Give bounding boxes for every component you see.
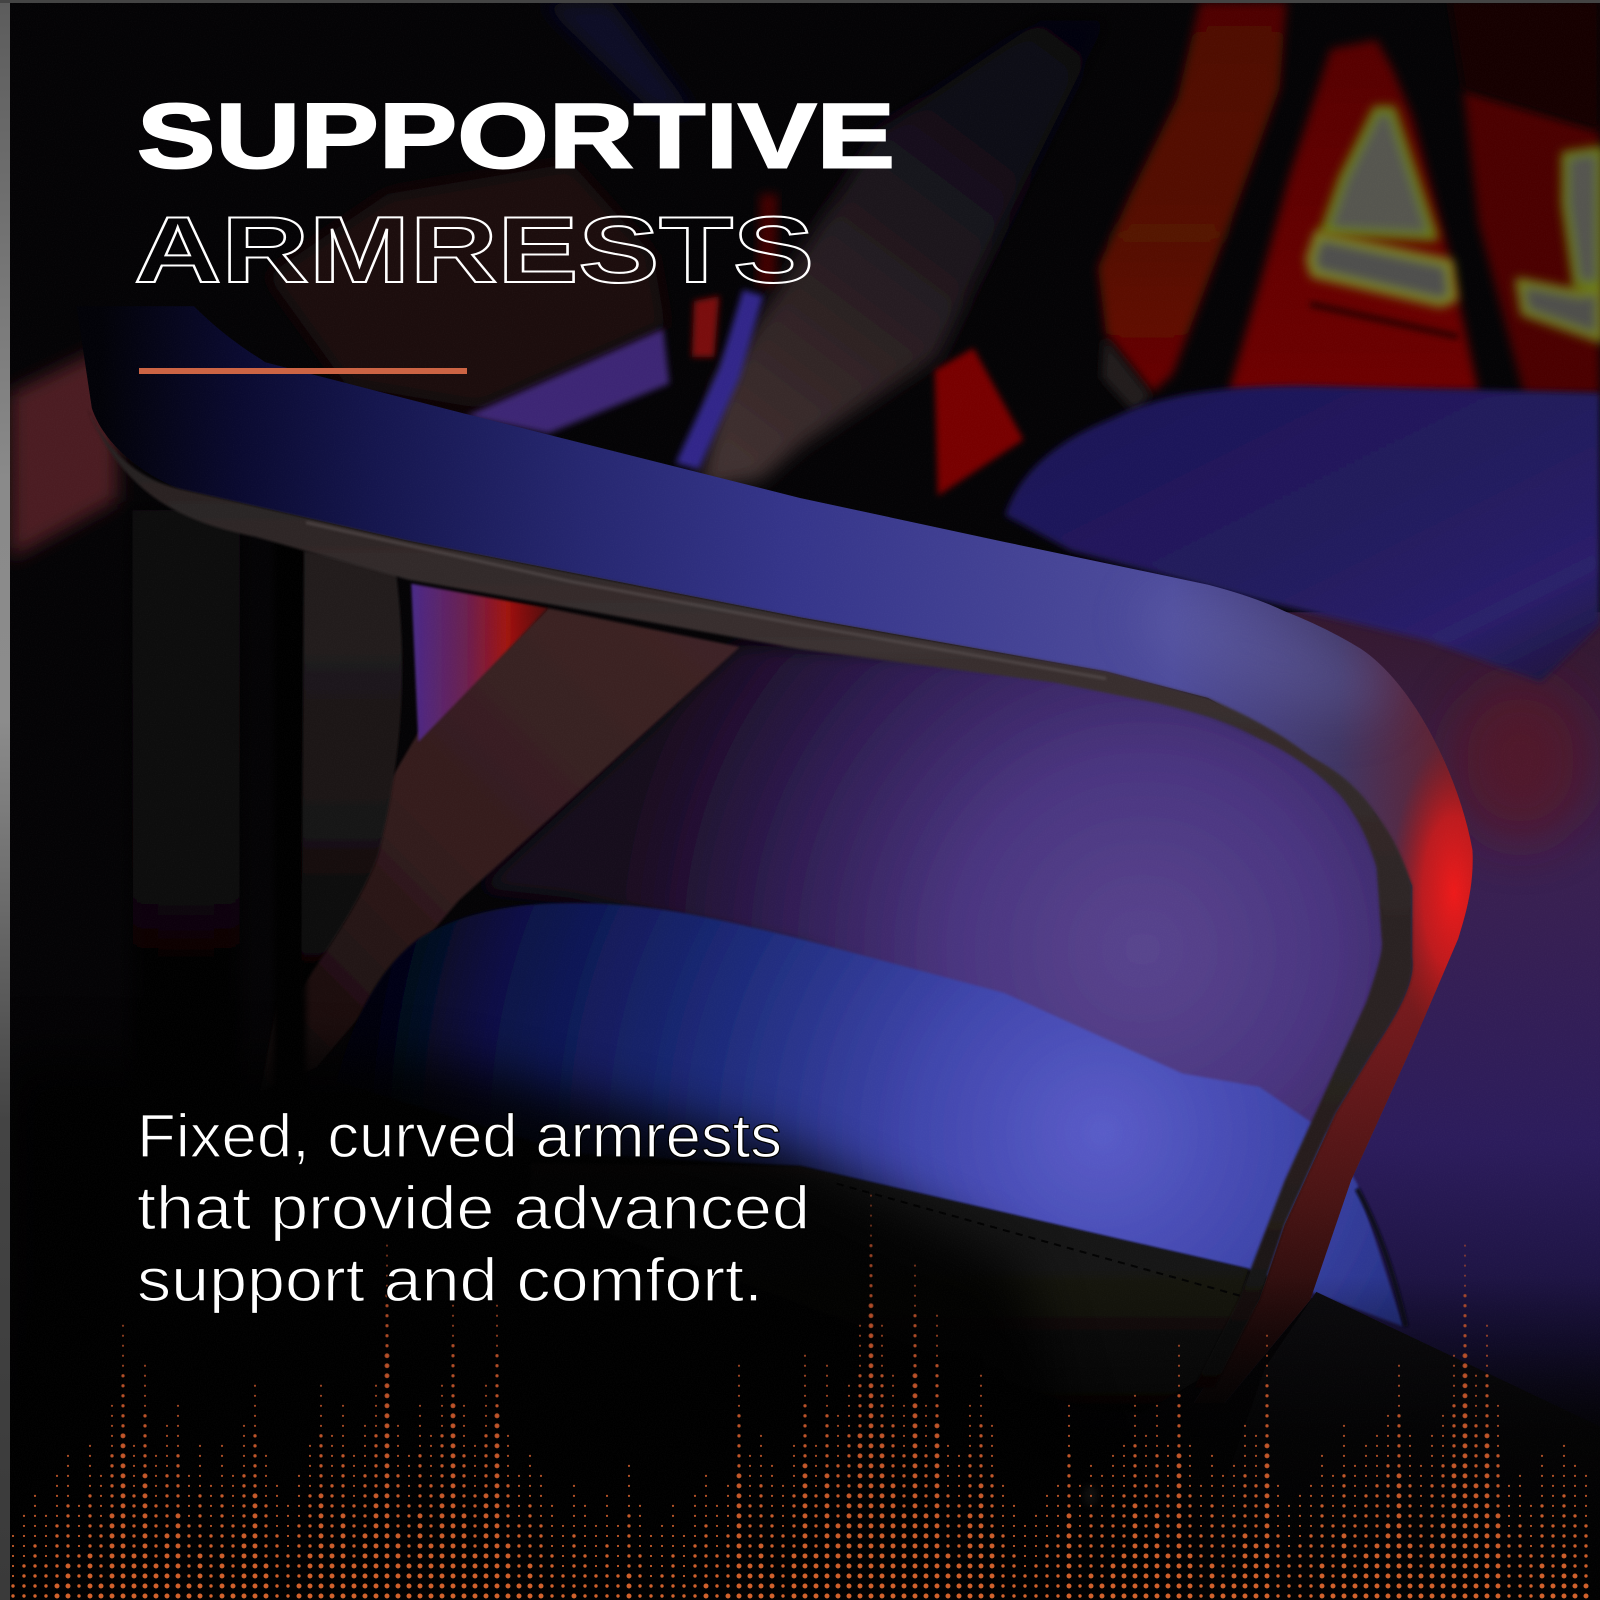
- armrest top face: [61, 286, 1517, 1418]
- chair back: left red wall band: [10, 342, 117, 559]
- reflective logo triangle: [1324, 110, 1434, 237]
- blue seat cushion: [337, 903, 1403, 1327]
- red glow right of bend: [1449, 679, 1592, 842]
- base bolt: [1083, 1486, 1097, 1506]
- red seat panel centre: [1229, 40, 1479, 393]
- description line 1: Fixed, curved armrests: [137, 1102, 782, 1170]
- left edge grey strip: [0, 0, 10, 1600]
- grey edge under left panel: [1102, 337, 1151, 413]
- description line 3: support and comfort.: [137, 1246, 763, 1314]
- chair back: blue piping: [676, 290, 763, 469]
- chair back: mesh panel: [267, 163, 665, 408]
- chair post shadow: [273, 531, 306, 1102]
- chair back: navy strap: [542, 3, 694, 112]
- title: [134, 86, 895, 302]
- bottom fade overlay: [0, 1276, 1600, 1600]
- black lower seat panel: [531, 1163, 1249, 1413]
- stitching: [837, 1184, 1241, 1296]
- small red wedge: [935, 348, 1023, 496]
- seat pad upper: [1005, 386, 1600, 682]
- chair back: diagonal grey band: [700, 20, 1106, 488]
- stitch curve on right cushion: [1357, 1189, 1406, 1327]
- seat back right of armrest: [1245, 612, 1600, 1429]
- red seat panel left: [1098, 2, 1287, 393]
- rim highlight: [306, 522, 1106, 679]
- diagonal tan strap: [260, 608, 740, 1092]
- title line: ARMRESTS outlined: ARMRESTS: [134, 197, 814, 302]
- logo right bar: [1519, 282, 1600, 339]
- medium dots: [13, 1240, 1586, 1596]
- description line 2: that provide advanced: [137, 1174, 810, 1242]
- chair post panel: [301, 551, 402, 990]
- seat seam: [1310, 304, 1458, 337]
- bottom orange halftone dots: [2, 1190, 1586, 1596]
- reflective logo bar: [1310, 235, 1453, 303]
- chair back: upper red glow: [757, 194, 778, 286]
- description text: [137, 1102, 810, 1314]
- bottom left black overlay: [0, 1051, 1122, 1600]
- large dots: [57, 1300, 1586, 1596]
- dark upper right: [1449, 0, 1600, 130]
- armrest dark rim: [87, 408, 1413, 1388]
- armrest highlight: [1182, 602, 1397, 725]
- small dots: [2, 1190, 1586, 1596]
- top edge grey line: [0, 0, 1600, 3]
- title line: SUPPORTIVE: SUPPORTIVE: [137, 86, 895, 188]
- red and purple glow wedge: [411, 584, 548, 742]
- logo right stem: [1565, 150, 1600, 286]
- chair back: purple trim: [465, 329, 669, 434]
- armrest face base colour: [61, 286, 1490, 1418]
- reflective logo right: [1519, 150, 1600, 339]
- armrest red glow: [1398, 754, 1473, 1014]
- armrest lower red falloff: [1194, 932, 1454, 1403]
- lower right seam: [1184, 1292, 1600, 1600]
- red seat panel right: [1463, 89, 1600, 396]
- seat back purple cushion: [480, 645, 1429, 1153]
- chair post left dark: [133, 510, 240, 1082]
- orange divider: [139, 368, 467, 374]
- chair back: red glow behind straps: [692, 296, 719, 357]
